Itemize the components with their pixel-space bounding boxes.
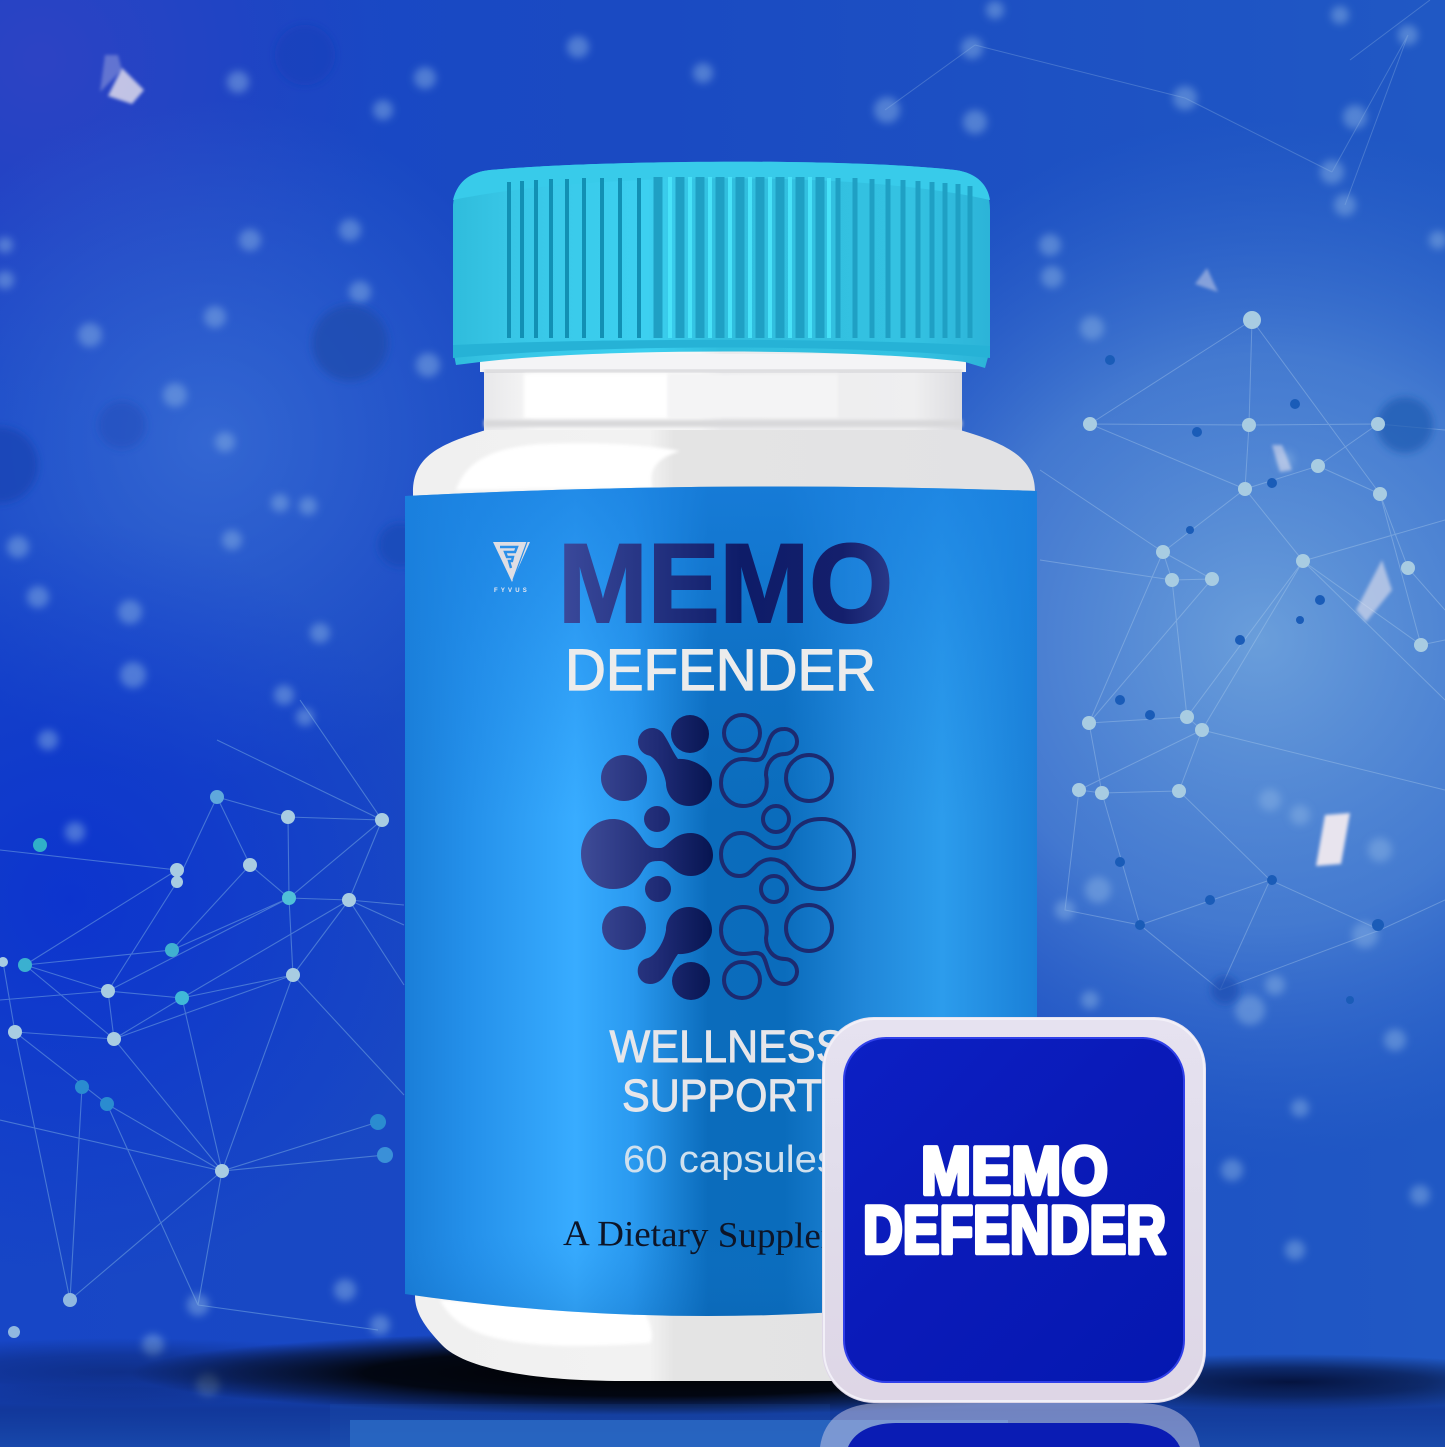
ground shadow band — [0, 1331, 1445, 1415]
label heading: DEFENDER: DEFENDER — [565, 638, 876, 703]
shoulder highlight — [456, 443, 680, 490]
reflection: bottle panel — [330, 1404, 1008, 1447]
badge text: MEMO — [921, 1133, 1108, 1209]
badge panel — [844, 1038, 1184, 1382]
badge text: DEFENDER — [863, 1192, 1166, 1268]
label — [405, 487, 1037, 1316]
background: left network lines — [0, 700, 404, 1330]
logo: FYVUS — [493, 542, 530, 594]
background: blurred dark circles — [0, 25, 1433, 1004]
cap: dark grooves — [509, 178, 639, 338]
badge frame — [822, 1017, 1206, 1403]
reflection: badge — [820, 1403, 1200, 1447]
badge text — [863, 1133, 1166, 1268]
badge: memo defender — [822, 1017, 1206, 1403]
brain icon: outlined half — [721, 715, 854, 998]
label text: dietary supplement: A Dietary Supplement — [563, 1213, 895, 1256]
background: right network lines — [885, 0, 1445, 990]
label text: wellness support: SUPPORT — [622, 1070, 822, 1121]
bottle body — [413, 430, 1035, 1381]
bottle — [405, 162, 1037, 1381]
bottle neck — [480, 350, 966, 445]
label heading: MEMO: MEMO — [558, 521, 893, 646]
label text: capsule count: 60 capsules — [623, 1139, 837, 1181]
background: small blue dots on right — [1105, 355, 1384, 1004]
background: white shards — [100, 55, 1392, 866]
label text: wellness support: WELLNESS — [610, 1021, 844, 1072]
label text: wellness support — [610, 1021, 844, 1121]
cap — [453, 162, 990, 368]
cap: light ribs — [670, 177, 829, 338]
background: crisp network nodes — [0, 311, 1428, 1338]
floor strip — [0, 1385, 1445, 1447]
base highlight — [440, 1300, 652, 1346]
logo: FYVUS: FYVUS — [494, 588, 530, 594]
brain icon: solid half — [581, 715, 713, 1000]
